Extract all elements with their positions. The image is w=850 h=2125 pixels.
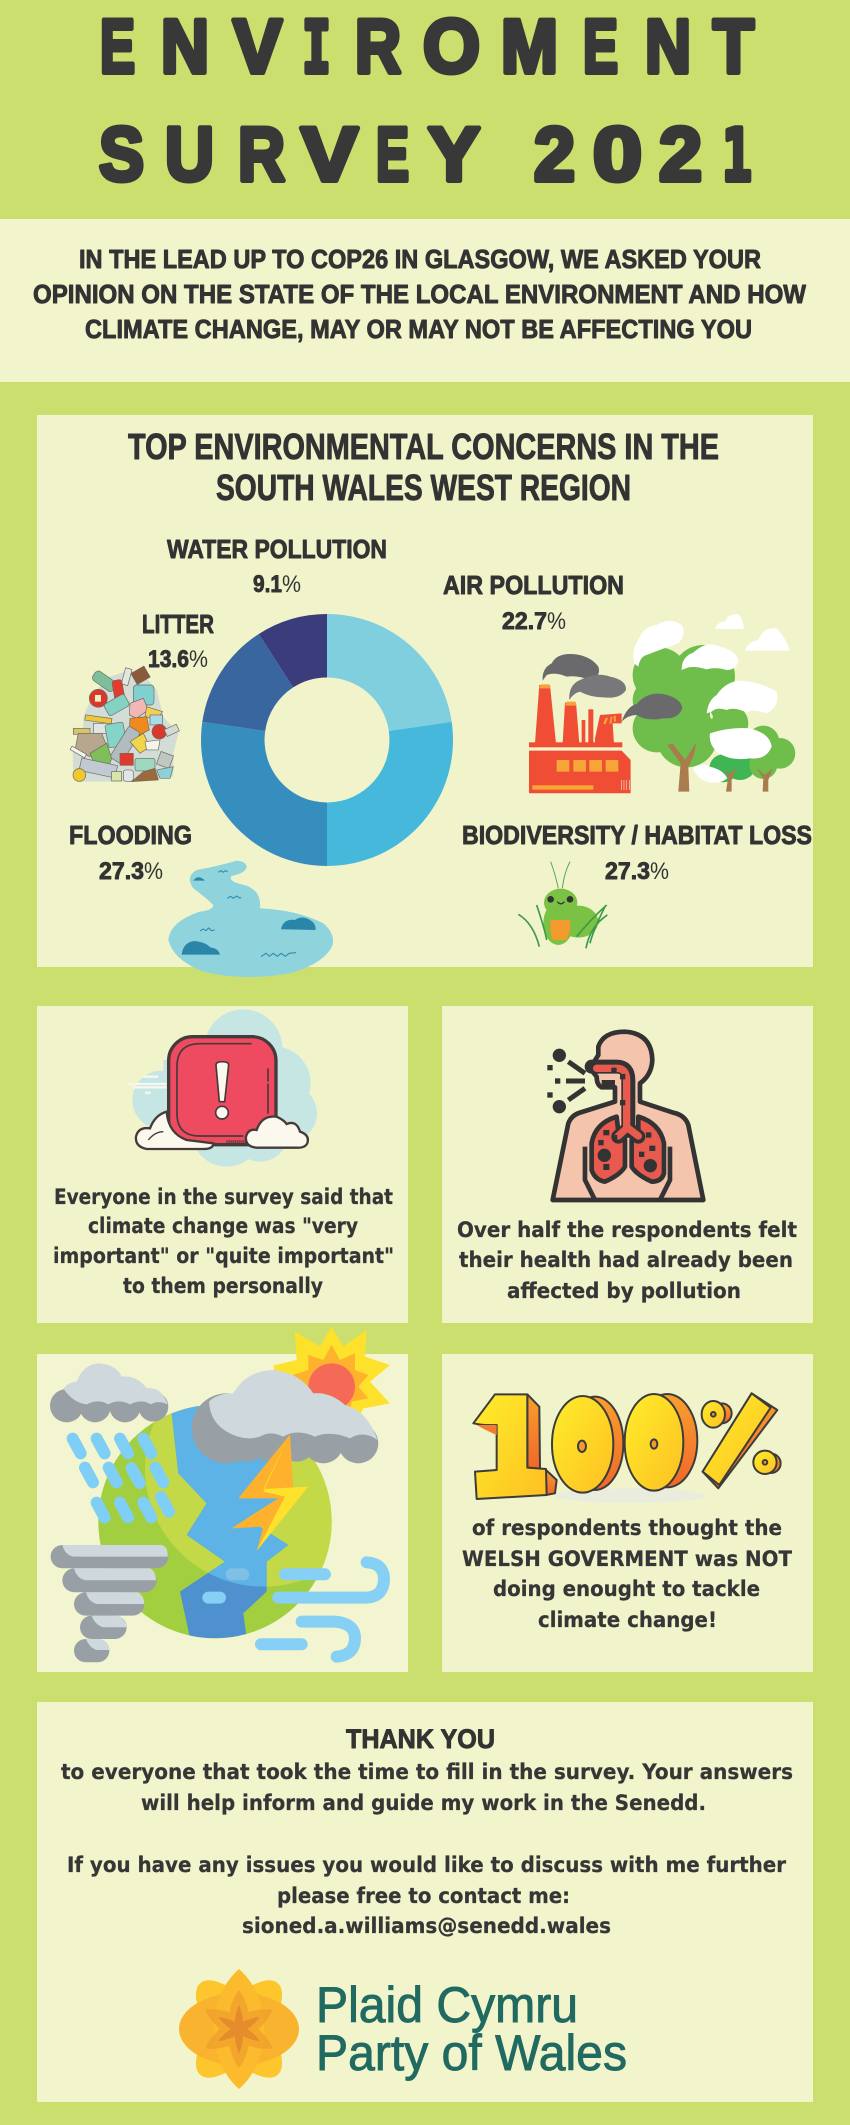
icon: factory and trees: [529, 614, 795, 793]
title: N: [161, 4, 209, 90]
icon: alert sign with clouds: [128, 1009, 317, 1167]
thank you message: [61, 1760, 793, 1938]
label: biodiversity: 27.3: [605, 858, 650, 885]
factory: [529, 685, 631, 793]
smoke: [543, 654, 682, 722]
intro text: [33, 244, 806, 344]
title: V: [233, 4, 282, 90]
title: S: [99, 112, 144, 198]
label: air pollution: [443, 570, 624, 635]
icon: litter pile: [70, 666, 179, 782]
title: 2: [659, 112, 702, 198]
text: of respondents thought the: [472, 1516, 782, 1540]
label: water pollution: 9.1: [253, 571, 282, 598]
title: 2: [534, 112, 575, 198]
title: Y: [428, 112, 480, 198]
label: litter: 13.6: [148, 646, 189, 673]
title: T: [713, 4, 754, 90]
label: water pollution: WATER POLLUTION: [167, 534, 387, 564]
title: O: [423, 4, 480, 90]
text: [53, 1185, 394, 1298]
text: important" or "quite important": [53, 1244, 394, 1268]
label: flooding: 27.3: [99, 858, 144, 885]
title: R: [355, 4, 401, 90]
logo text: [316, 1977, 627, 2081]
label: air pollution: %: [547, 608, 566, 635]
label: water pollution: %: [282, 571, 301, 598]
panel: extreme weather: [37, 1327, 408, 1672]
title: 1: [722, 114, 752, 198]
label: biodiversity: [462, 820, 812, 885]
label: litter: %: [189, 646, 208, 673]
label: flooding: FLOODING: [69, 820, 192, 850]
intro text: IN THE LEAD UP TO COP26 IN GLASGOW, WE ASKED YOUR: [79, 244, 761, 274]
tornado: [51, 1545, 168, 1662]
text: [462, 1516, 793, 1632]
panel: climate change importance: [37, 1006, 408, 1323]
title: I: [302, 6, 331, 90]
text: climate change!: [538, 1608, 717, 1632]
panel heading: [128, 426, 719, 508]
panel: top environmental concerns: [37, 415, 813, 977]
label: water pollution: [167, 534, 387, 598]
thank you message: sioned.a.williams@senedd.wales: [242, 1914, 611, 1938]
label: litter: [142, 609, 214, 673]
label: biodiversity: %: [650, 858, 669, 885]
label: litter: LITTER: [142, 609, 214, 639]
title: U: [165, 112, 214, 198]
icon: 100%: [473, 1393, 781, 1503]
text: affected by pollution: [507, 1279, 741, 1303]
label: biodiversity: BIODIVERSITY / HABITAT LOSS: [462, 820, 812, 850]
thank you message: will help inform and guide my work in the Senedd.: [141, 1791, 706, 1815]
label: flooding: %: [144, 858, 163, 885]
panel: thank you: [37, 1702, 813, 2102]
label: air pollution: 22.7: [502, 608, 547, 635]
label: flooding: [69, 820, 192, 885]
logo text: Party of Wales: [316, 2025, 627, 2081]
icon: flooded river: [168, 861, 333, 977]
storm cloud: [192, 1393, 378, 1463]
text: to them personally: [123, 1274, 323, 1298]
text: doing enought to tackle: [493, 1577, 760, 1601]
panel heading: TOP ENVIRONMENTAL CONCERNS IN THE: [128, 426, 719, 467]
title: E: [376, 112, 409, 198]
text: [457, 1218, 797, 1303]
clouds: [633, 614, 790, 783]
sun: [273, 1327, 390, 1428]
thank you message: please free to contact me:: [277, 1884, 570, 1908]
label: air pollution: AIR POLLUTION: [443, 570, 624, 600]
intro text: CLIMATE CHANGE, MAY OR MAY NOT BE AFFECTING YOU: [85, 314, 752, 344]
icon: lungs and pollution: [547, 1032, 703, 1200]
wind: [261, 1562, 384, 1657]
trees: [633, 645, 743, 767]
small cloud: [50, 1389, 168, 1422]
text: Everyone in the survey said that: [54, 1185, 393, 1209]
text: WELSH GOVERMENT was NOT: [462, 1547, 793, 1571]
title: N: [645, 4, 691, 90]
thank you message: If you have any issues you would like to discuss with me further: [67, 1853, 787, 1877]
panel: health affected by pollution: [442, 1006, 813, 1323]
text: their health had already been: [459, 1248, 793, 1272]
icon: earth with extreme weather: [50, 1327, 390, 1662]
globe: [98, 1405, 332, 1638]
rain: [73, 1439, 169, 1517]
title: 0: [593, 112, 642, 198]
intro text: OPINION ON THE STATE OF THE LOCAL ENVIRONMENT AND HOW: [33, 279, 806, 309]
thank you heading: THANK YOU: [346, 1724, 495, 1754]
text: climate change was "very: [88, 1214, 358, 1238]
thank you message: to everyone that took the time to fill in the survey. Your answers: [61, 1760, 793, 1784]
title: [99, 4, 754, 198]
panel: 100 percent: [442, 1354, 813, 1672]
title: E: [100, 4, 135, 90]
lightning: [232, 1434, 293, 1551]
panel: introduction: [0, 219, 850, 382]
title: E: [583, 4, 618, 90]
icon: daffodil logo: [179, 1967, 299, 2091]
icon: grasshopper: [518, 862, 607, 948]
logo text: Plaid Cymru: [316, 1977, 578, 2033]
panel heading: SOUTH WALES WEST REGION: [216, 467, 631, 508]
title: R: [238, 112, 285, 198]
donut chart: [201, 614, 453, 866]
title: M: [501, 4, 558, 90]
title: V: [301, 112, 358, 198]
text: Over half the respondents felt: [457, 1218, 797, 1242]
